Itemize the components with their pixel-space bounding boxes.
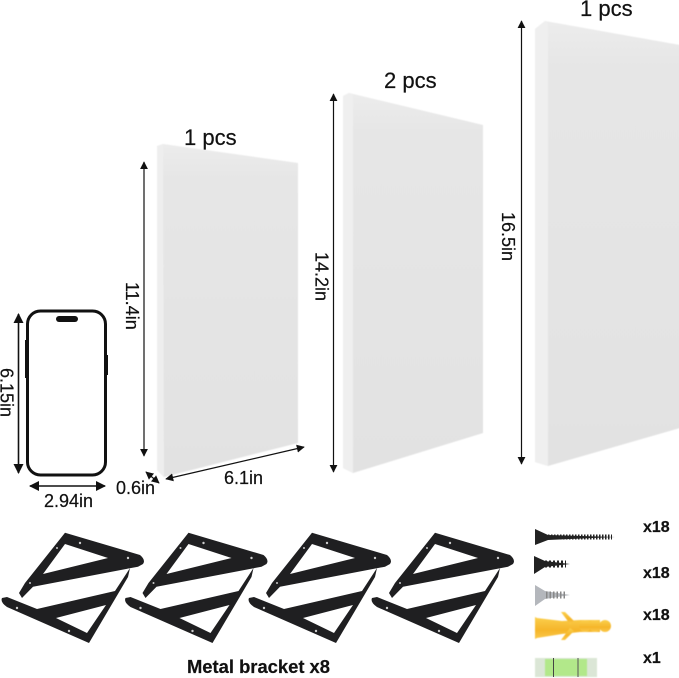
arrow: small shelf height <box>143 162 145 456</box>
icon: phone <box>25 311 108 475</box>
icon: short screw <box>534 556 570 574</box>
arrow: medium shelf height <box>332 94 334 472</box>
label: x1: x1 <box>643 650 661 667</box>
label: x18 long screw: x18 <box>643 519 670 536</box>
arrow: phone height <box>18 314 20 473</box>
label: 2.94in: 2.94in <box>44 491 93 511</box>
label: 1 pcs small shelf: 1 pcs <box>184 125 237 150</box>
label: 6.1in: 6.1in <box>224 468 263 488</box>
shelf: medium <box>343 93 483 473</box>
brackets <box>2 533 514 643</box>
label: x18 silver screw: x18 <box>643 607 670 624</box>
label: x18 short screw: x18 <box>643 565 670 582</box>
icon: wall anchor <box>535 612 611 640</box>
arrow: small shelf width <box>166 447 304 479</box>
shelf: large <box>535 21 679 466</box>
label: 2 pcs: 2 pcs <box>384 68 437 93</box>
icon: long screw <box>535 529 615 545</box>
arrow: thickness <box>146 472 159 483</box>
label: 14.2in: 14.2in <box>312 252 332 301</box>
icon: spirit level <box>535 658 597 677</box>
arrow: phone width <box>30 485 105 487</box>
shelf: small <box>157 144 298 477</box>
arrow: large shelf height <box>520 21 522 464</box>
label: 16.5in: 16.5in <box>498 212 518 261</box>
label: 11.4in: 11.4in <box>122 282 142 330</box>
label: 0.6in: 0.6in <box>116 478 155 498</box>
label: metal bracket: Metal bracket x8 <box>187 657 330 677</box>
icon: silver screw <box>535 585 570 606</box>
